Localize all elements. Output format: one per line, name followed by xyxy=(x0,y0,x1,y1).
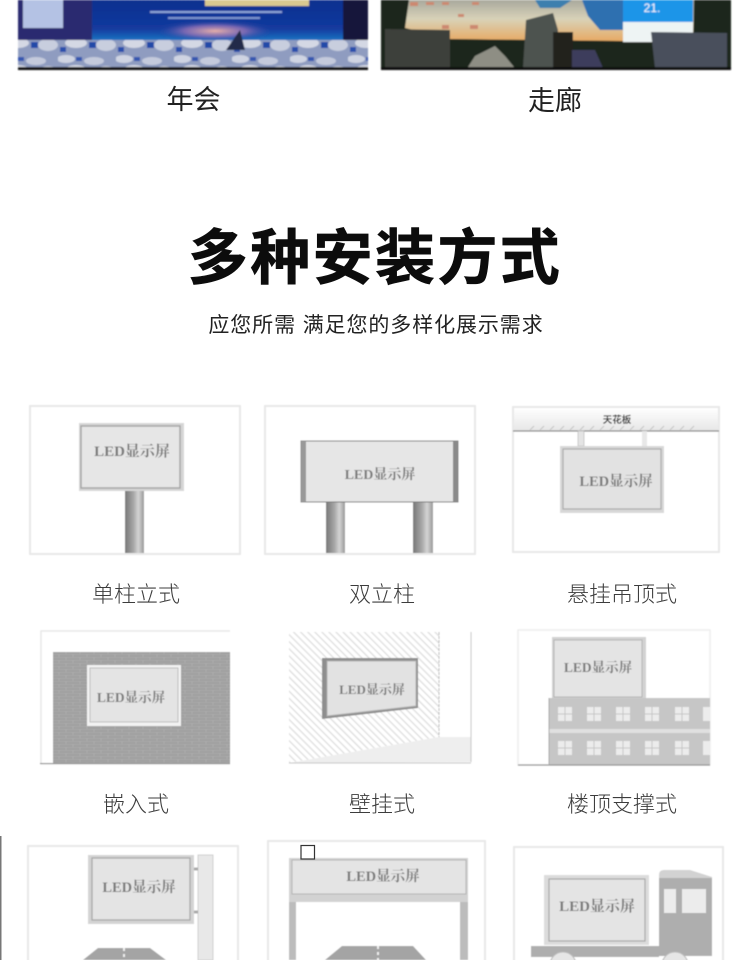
panel: single column xyxy=(30,406,240,554)
panel: embedded: LED显示屏 xyxy=(97,690,166,705)
panel: ceiling hung: 天花板 xyxy=(603,414,632,426)
panel: gantry xyxy=(268,841,485,960)
caption: embedded: 嵌入式 xyxy=(103,792,169,817)
panel: truck mounted xyxy=(514,847,723,960)
subtitle: 应您所需 满足您的多样化展示需求 xyxy=(208,314,544,337)
edge mark xyxy=(0,836,2,960)
icon: small empty square xyxy=(301,846,314,859)
photo: corridor xyxy=(381,0,731,70)
panel: gantry: LED显示屏 xyxy=(346,868,420,885)
photo: annual meeting xyxy=(18,0,368,70)
caption: double column: 双立柱 xyxy=(349,582,415,607)
caption: ceiling hung: 悬挂吊顶式 xyxy=(567,582,677,607)
title: 多种安装方式 xyxy=(188,225,562,292)
panel: double column: LED显示屏 xyxy=(345,467,415,483)
caption: rooftop support: 楼顶支撑式 xyxy=(567,792,677,817)
panel: ceiling hung: LED显示屏 xyxy=(579,473,653,490)
caption: corridor: 走廊 xyxy=(528,86,582,116)
panel: roadside pole: LED显示屏 xyxy=(102,879,176,896)
panel: truck mounted: LED显示屏 xyxy=(559,898,635,915)
panel: wall mounted xyxy=(289,632,471,763)
caption: annual meeting: 年会 xyxy=(166,85,220,115)
panel: double column xyxy=(265,406,475,554)
caption: wall mounted: 壁挂式 xyxy=(349,792,415,817)
caption: single column: 单柱立式 xyxy=(92,582,180,607)
photo: corridor: 21. xyxy=(644,1,660,15)
panel: ceiling hung xyxy=(513,407,719,552)
panel: wall mounted: LED显示屏 xyxy=(339,682,405,697)
panel: rooftop support: LED显示屏 xyxy=(564,660,633,675)
panel: rooftop support xyxy=(518,630,710,765)
panel: roadside pole xyxy=(28,846,238,960)
panel: embedded xyxy=(40,631,230,764)
panel: single column: LED显示屏 xyxy=(94,443,170,460)
